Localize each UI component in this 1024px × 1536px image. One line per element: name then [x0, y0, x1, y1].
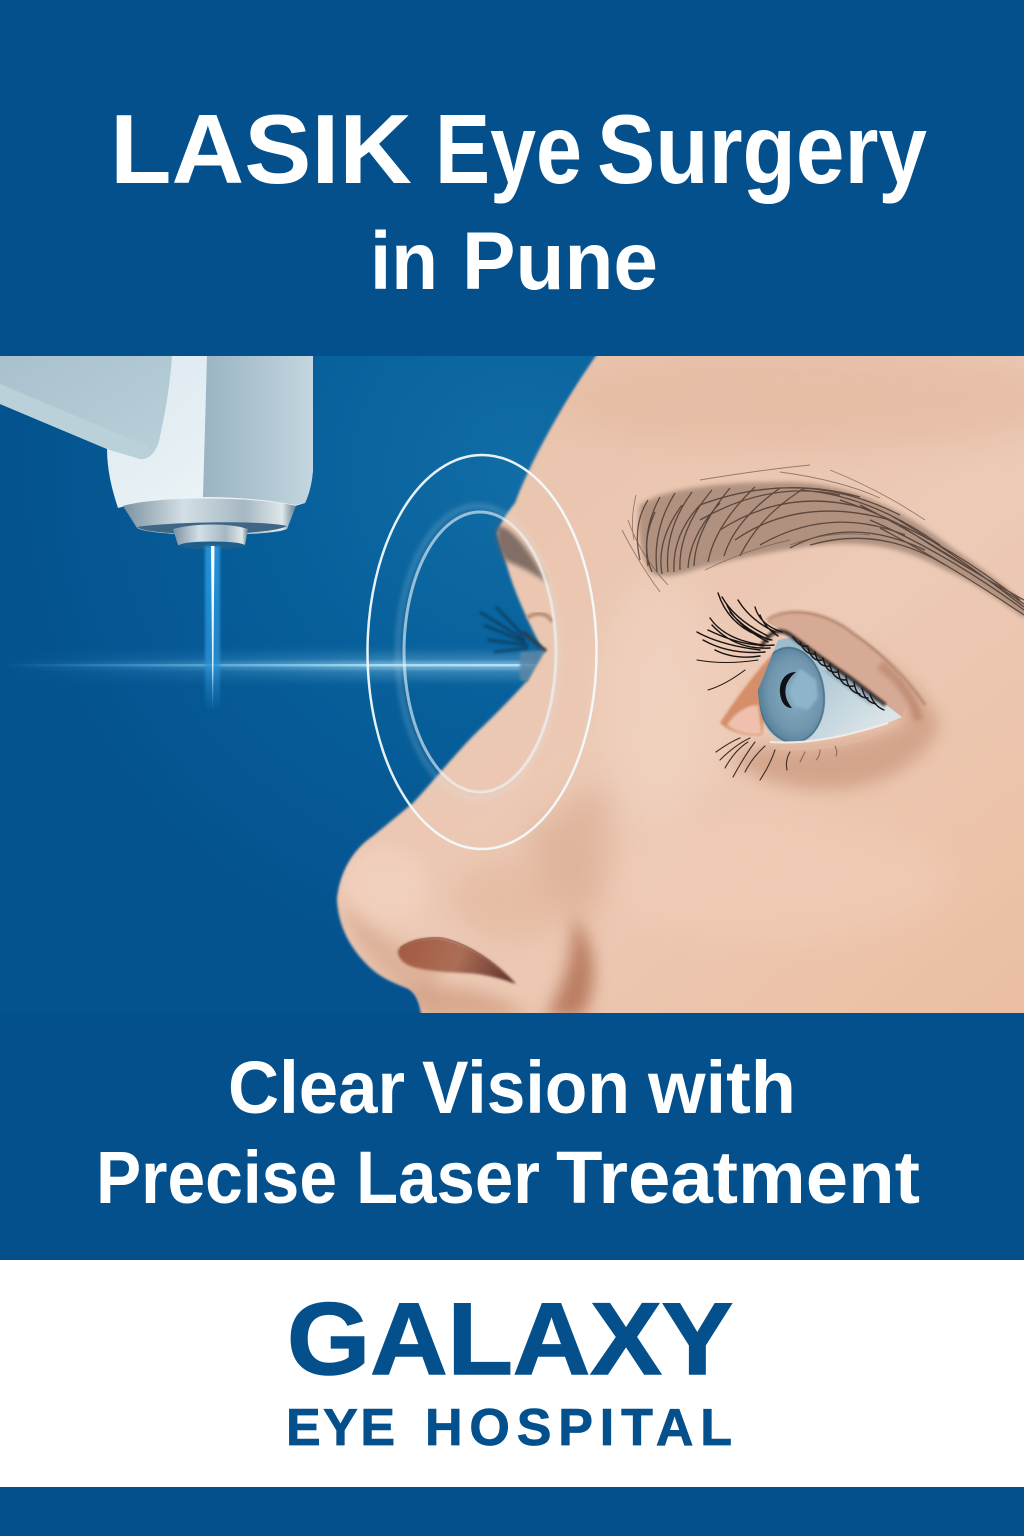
bottom band [0, 1487, 1024, 1536]
lid crease [767, 612, 925, 705]
ala tone [454, 860, 556, 939]
tagline banner [0, 1013, 1024, 1260]
upper eyelid [767, 612, 910, 717]
tagline line 1: with [647, 1046, 796, 1129]
device arm [0, 356, 172, 459]
inner corner [719, 652, 773, 736]
lash line [762, 631, 884, 704]
horizontal laser beam [0, 654, 545, 678]
eye socket shadow [730, 640, 940, 790]
nose tip light [338, 842, 410, 907]
lens highlight [789, 668, 818, 710]
far side eye [480, 526, 552, 682]
title line 1: Eye [435, 94, 582, 204]
pupil [780, 672, 796, 708]
device ring [123, 498, 296, 535]
tagline line 2: Treatment [556, 1136, 920, 1219]
lower lid rim [770, 723, 888, 743]
targeting rings [368, 455, 596, 849]
face profile [337, 350, 1024, 1020]
title line 2 [370, 216, 658, 307]
logo panel [0, 1260, 1024, 1487]
laser device [0, 356, 313, 550]
tagline line 2 [96, 1136, 920, 1219]
title line 1: Surgery [597, 94, 927, 204]
title line 1: LASIK [110, 94, 412, 204]
nose underside shade [340, 908, 444, 1010]
title line 1 [110, 94, 927, 204]
title line 2: Pune [462, 216, 658, 307]
lower lashes [716, 738, 837, 780]
device body [107, 356, 313, 508]
photo background [126, 356, 596, 836]
tagline line 1 [228, 1046, 796, 1129]
logo EYE HOSPITAL [286, 1399, 732, 1457]
vertical laser beam [205, 546, 220, 712]
logo GALAXY: GALAXY [287, 1282, 733, 1396]
cheek light [610, 820, 950, 940]
logo EYE HOSPITAL: HOSPITAL [425, 1399, 732, 1457]
nostril [398, 938, 516, 984]
eyebrow [622, 465, 1024, 618]
tagline line 2: Precise [96, 1136, 337, 1219]
photo panel: laser and eye [0, 350, 1024, 1020]
tagline line 2: Laser [356, 1136, 540, 1219]
eye [697, 593, 940, 790]
iris [758, 647, 825, 742]
forehead tone [558, 358, 1024, 442]
nose bridge shade [527, 780, 608, 925]
tagline line 1: Clear [228, 1046, 405, 1129]
device nozzle [173, 524, 248, 545]
sclera and iris [758, 637, 902, 742]
logo EYE HOSPITAL: EYE [286, 1399, 395, 1457]
ala crease shadow [545, 915, 594, 1018]
tagline line 1: Vision [422, 1046, 630, 1129]
upper lashes [697, 593, 884, 710]
title line 2: in [370, 216, 438, 307]
top banner [0, 0, 1024, 356]
device right panel [203, 356, 313, 505]
